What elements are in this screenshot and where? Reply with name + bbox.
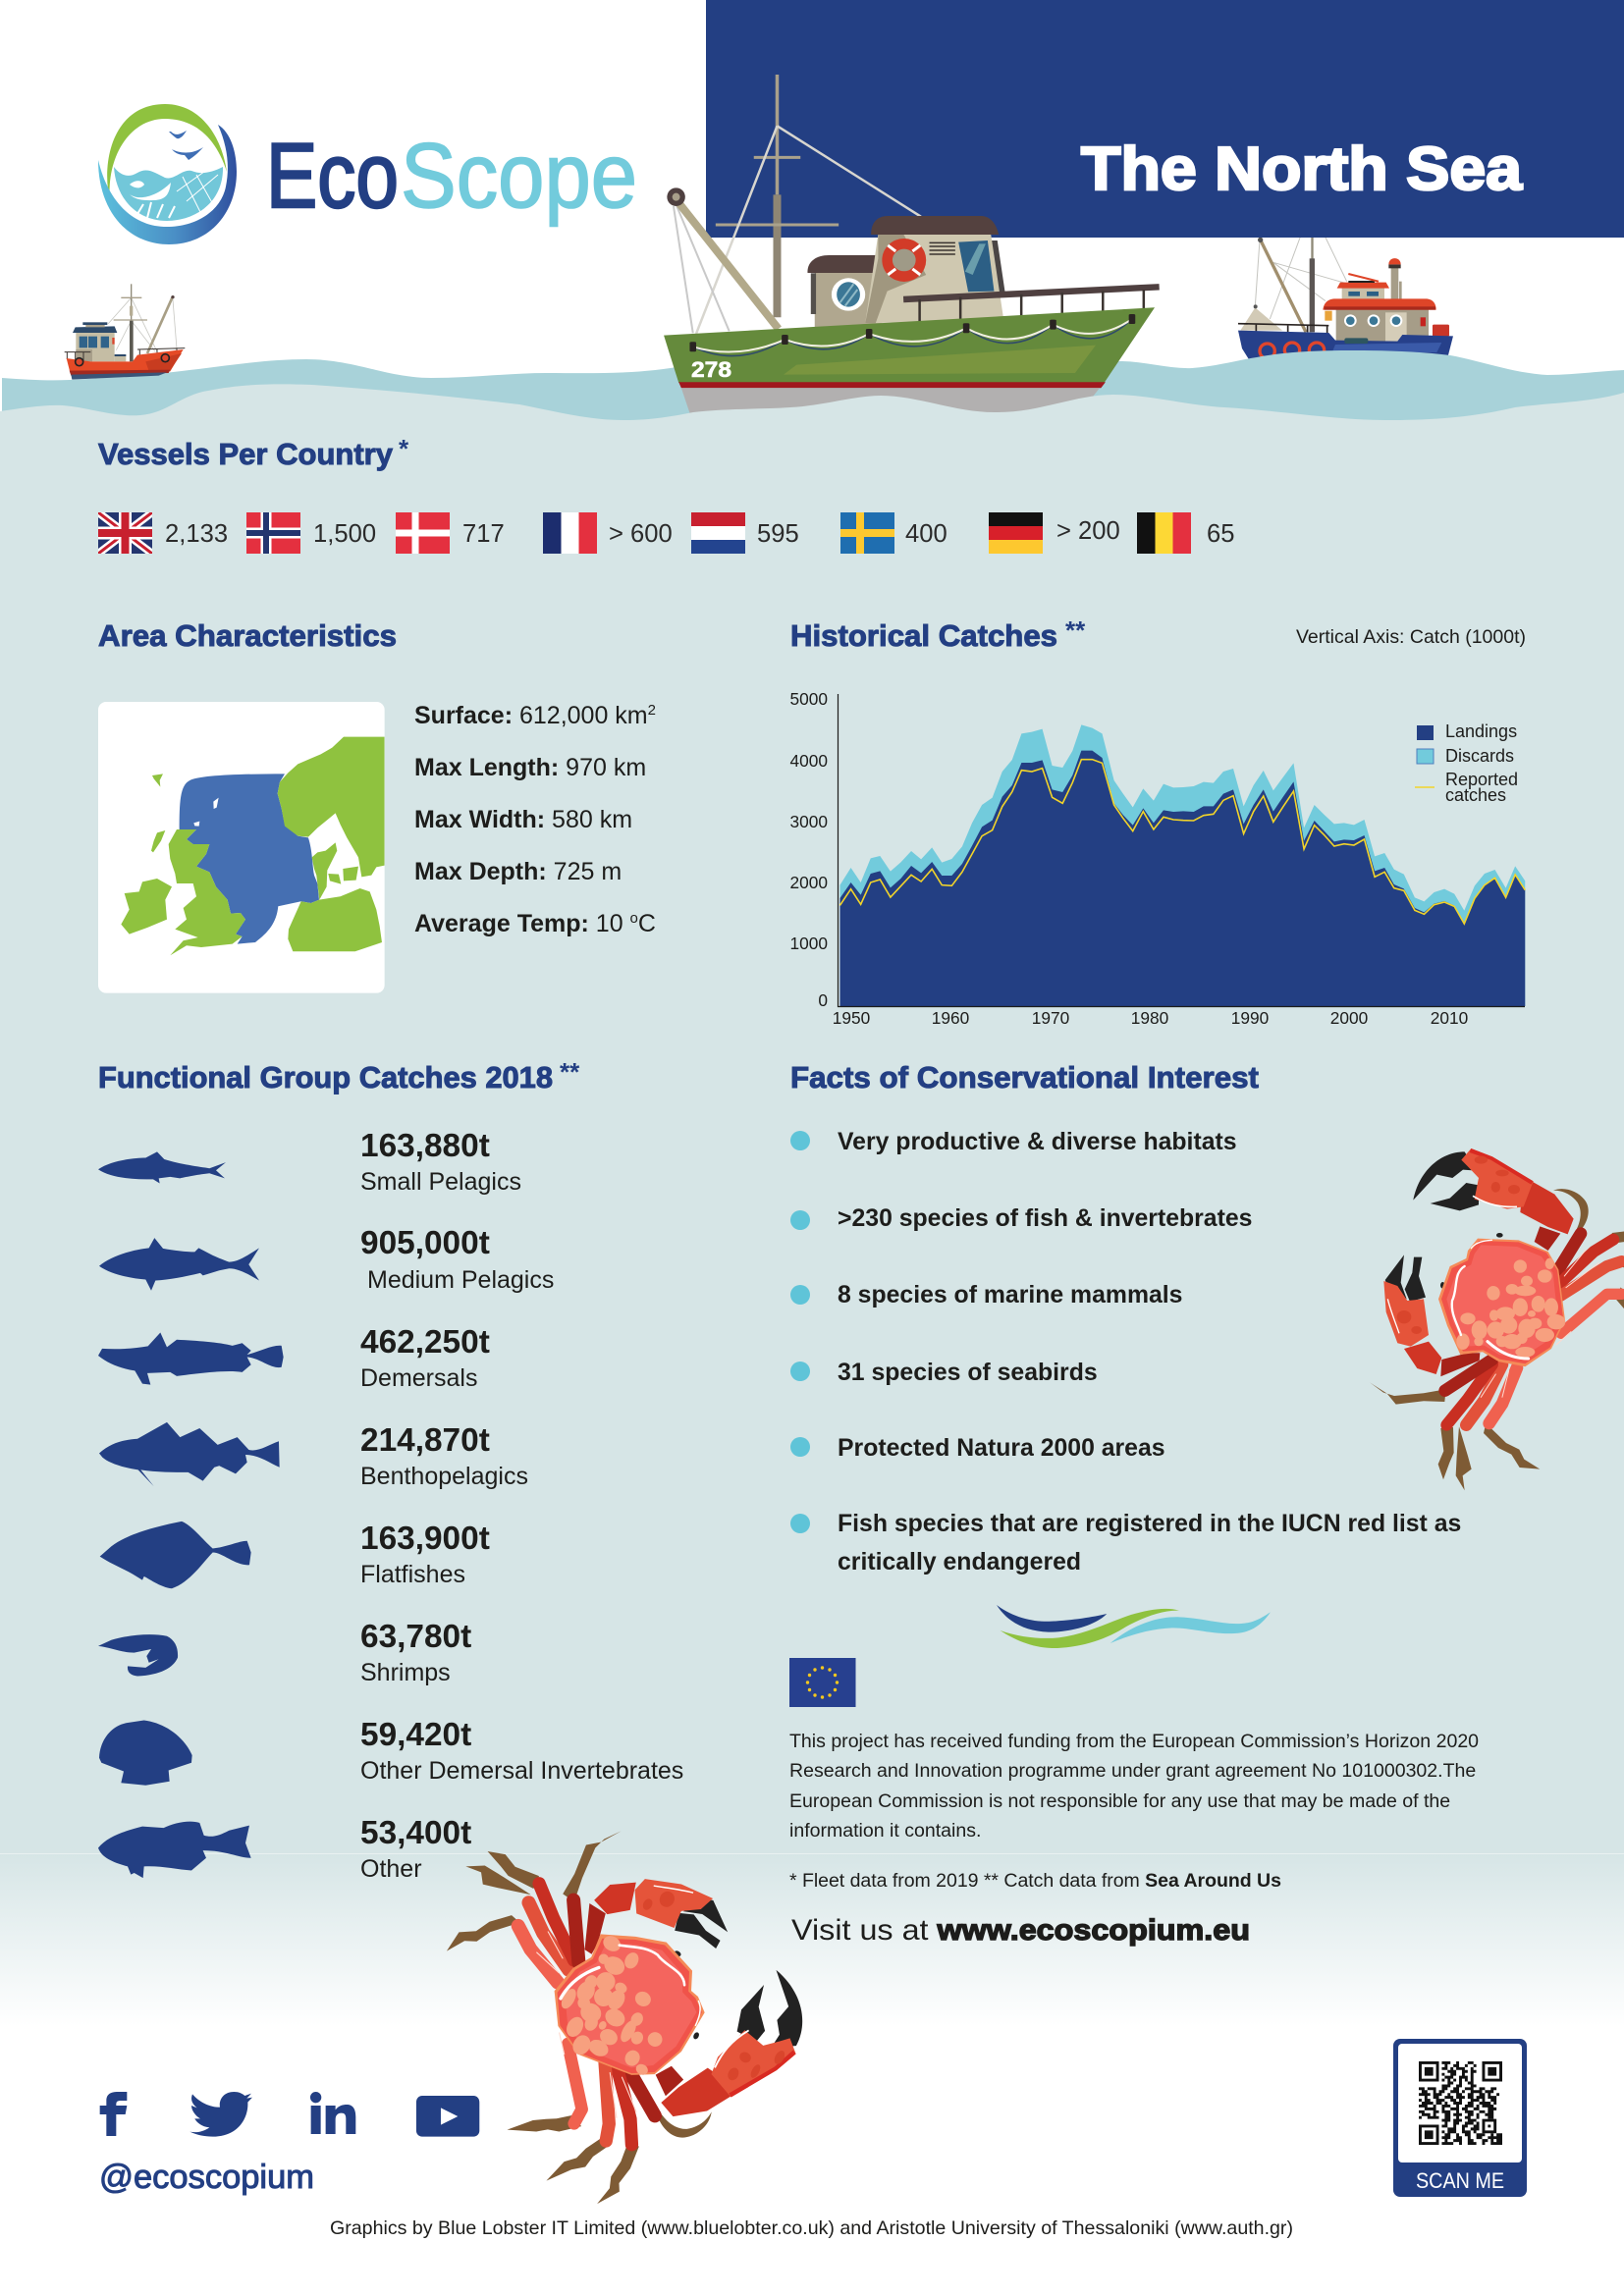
- heading: area characteristics: Area Characteristics: [98, 618, 397, 653]
- y axis labels: 0: [818, 990, 828, 1010]
- sea background: [0, 384, 1624, 1853]
- functional group values: 163,880t: [360, 1128, 490, 1164]
- illustration: small red trawler: [65, 284, 185, 380]
- functional group values: 462,250t: [360, 1324, 490, 1361]
- chart legend: Landings: [1445, 721, 1517, 741]
- flags row: vessels per country: 1,500: [313, 520, 376, 548]
- footnote: * Fleet data from 2019 ** Catch data from Sea Around Us: [789, 1870, 1281, 1892]
- chart legend: Reported: [1445, 770, 1518, 789]
- facts list: >230 species of fish & invertebrates: [838, 1205, 1252, 1232]
- icon: EU flag: [789, 1658, 856, 1707]
- logo: EcoScope: Scope: [401, 124, 637, 227]
- heading: facts of conservational interest: Facts of Conservational Interest: [790, 1060, 1259, 1095]
- facts list: 31 species of seabirds: [838, 1360, 1098, 1386]
- funding statement: European Commission is not responsible for any use that may be made of the: [789, 1790, 1450, 1812]
- QR code: [1419, 2061, 1502, 2145]
- x axis labels: 1950: [833, 1008, 870, 1028]
- area statistics: o: [630, 910, 638, 927]
- lower background fade: [0, 1853, 1624, 2026]
- y axis labels: 1000: [790, 934, 828, 953]
- x axis labels: 1960: [932, 1008, 969, 1028]
- icon: shrimp: [98, 1634, 178, 1677]
- icon: flatfish: [100, 1522, 251, 1588]
- facts list: critically endangered: [838, 1549, 1081, 1575]
- icon: medium pelagic: [99, 1238, 259, 1291]
- functional group values: 905,000t: [360, 1225, 490, 1261]
- heading: historical catches: **: [1065, 615, 1086, 645]
- footer credits: Graphics by Blue Lobster IT Limited (www.bluelobter.co.uk) and Aristotle University of Thessaloniki (www.auth.gr): [330, 2217, 1293, 2239]
- functional group values: Demersals: [360, 1364, 477, 1392]
- heading: vessels per country: *: [399, 434, 409, 463]
- website link: Visit us at www.ecoscopium.eu: [791, 1914, 1250, 1947]
- title banner: [706, 0, 1624, 238]
- functional group values: 163,900t: [360, 1521, 490, 1557]
- icon: other fish: [98, 1822, 251, 1878]
- map: North Sea: [98, 702, 385, 993]
- flag: Germany: [989, 512, 1043, 554]
- illustration: small blue trawler: [1238, 231, 1453, 361]
- logo emblem: [98, 104, 237, 244]
- heading: vessels per country: Vessels Per Country: [98, 437, 394, 471]
- swoosh logo mark: [997, 1605, 1271, 1648]
- logo wordmark: Eco: [266, 124, 399, 227]
- flag: France: [543, 512, 597, 554]
- flags row: vessels per country: 717: [462, 520, 505, 548]
- wave: back: [2, 350, 1624, 432]
- flag: Sweden: [840, 512, 894, 554]
- axis caption: Vertical Axis: Catch (1000t): [1296, 626, 1526, 648]
- area statistics: Max Width: 580 km: [414, 806, 632, 833]
- functional group values: 53,400t: [360, 1815, 471, 1851]
- functional group values: Other Demersal Invertebrates: [360, 1757, 683, 1785]
- facts list: [790, 1129, 1461, 1575]
- functional group values: 63,780t: [360, 1619, 471, 1655]
- functional group values: Other: [360, 1855, 422, 1883]
- functional group values: 59,420t: [360, 1717, 471, 1753]
- flags row: vessels per country: > 200: [1056, 517, 1120, 545]
- social media icons: [100, 2092, 479, 2137]
- area statistics: 2: [648, 702, 656, 719]
- icon: linkedin: [310, 2092, 355, 2134]
- functional group values: Flatfishes: [360, 1561, 465, 1588]
- functional group silhouettes: [98, 1151, 284, 1878]
- chart legend: Discards: [1445, 746, 1514, 766]
- funding statement: information it contains.: [789, 1820, 981, 1842]
- area statistics: C: [638, 910, 656, 937]
- chart legend: catches: [1445, 785, 1506, 805]
- icon: small pelagic: [98, 1151, 226, 1184]
- flags row: vessels per country: 595: [757, 520, 799, 548]
- flags row: vessels per country: 2,133: [165, 520, 228, 548]
- area statistics: [414, 702, 656, 937]
- QR code card: SCAN ME: [1416, 2168, 1504, 2193]
- x axis labels: 1990: [1231, 1008, 1269, 1028]
- x axis labels: 2010: [1431, 1008, 1468, 1028]
- area statistics: Average Temp: 10: [414, 910, 623, 937]
- area statistics: Max Length: 970 km: [414, 754, 646, 781]
- flag: Netherlands: [691, 512, 745, 554]
- flag: Belgium: [1137, 512, 1191, 554]
- facts list: Fish species that are registered in the IUCN red list as: [838, 1511, 1461, 1537]
- y axis labels: 5000: [790, 689, 828, 709]
- x axis labels: 2000: [1330, 1008, 1368, 1028]
- funding statement: Research and Innovation programme under grant agreement No 101000302.The: [789, 1760, 1476, 1782]
- functional group values: 214,870t: [360, 1422, 490, 1459]
- x axis labels: 1970: [1032, 1008, 1069, 1028]
- funding statement: [789, 1731, 1479, 1842]
- y axis labels: 4000: [790, 751, 828, 771]
- functional group values: Benthopelagics: [360, 1463, 528, 1490]
- x axis labels: [833, 1008, 1468, 1028]
- icon: facebook: [100, 2092, 127, 2136]
- y axis labels: 3000: [790, 812, 828, 831]
- functional group values: Medium Pelagics: [367, 1266, 554, 1294]
- facts list: Protected Natura 2000 areas: [838, 1435, 1165, 1462]
- title: The North Sea: [1081, 135, 1523, 203]
- flags row: vessels per country: 65: [1207, 520, 1234, 548]
- heading: historical catches: Historical Catches: [790, 618, 1057, 653]
- boat number: 278: [691, 357, 731, 382]
- icon: twitter: [189, 2092, 252, 2137]
- icon: benthopelagic: [99, 1422, 280, 1486]
- y axis labels: 2000: [790, 873, 828, 892]
- functional group values: [360, 1128, 683, 1883]
- facts list: Very productive & diverse habitats: [838, 1129, 1237, 1155]
- chart: historical catches: [790, 689, 1525, 1028]
- area statistics: Surface: 612,000 km: [414, 702, 648, 729]
- chart legend: [1415, 721, 1518, 805]
- facts list: 8 species of marine mammals: [838, 1282, 1182, 1308]
- heading: functional group catches: Functional Group Catches 2018: [98, 1060, 553, 1095]
- x axis labels: 1980: [1131, 1008, 1168, 1028]
- area statistics: Max Depth: 725 m: [414, 858, 622, 885]
- illustration: crab right: [1370, 1148, 1624, 1490]
- flag: UK: [98, 512, 152, 554]
- flags row: vessels per country: 400: [905, 520, 947, 548]
- flag: Norway: [246, 512, 300, 554]
- illustration: crab bottom: [352, 1774, 849, 2257]
- flags row: vessels per country: > 600: [609, 520, 673, 548]
- flags row: vessels per country: [98, 512, 1234, 554]
- QR code card: [1393, 2039, 1527, 2197]
- y axis labels: [790, 689, 828, 1010]
- flag: Denmark: [396, 512, 450, 554]
- logo: EcoScope: [98, 104, 637, 244]
- icon: youtube: [416, 2096, 479, 2137]
- icon: demersal: [98, 1333, 284, 1385]
- illustration: green fishing boat: [664, 75, 1160, 419]
- functional group values: Shrimps: [360, 1659, 451, 1686]
- chart areas: [839, 724, 1525, 1006]
- funding statement: This project has received funding from the European Commission’s Horizon 2020: [789, 1731, 1479, 1752]
- icon: scallop: [99, 1720, 192, 1786]
- functional group values: Small Pelagics: [360, 1168, 521, 1196]
- social handle: @ecoscopium: [99, 2159, 314, 2196]
- heading: functional group catches: **: [560, 1057, 580, 1087]
